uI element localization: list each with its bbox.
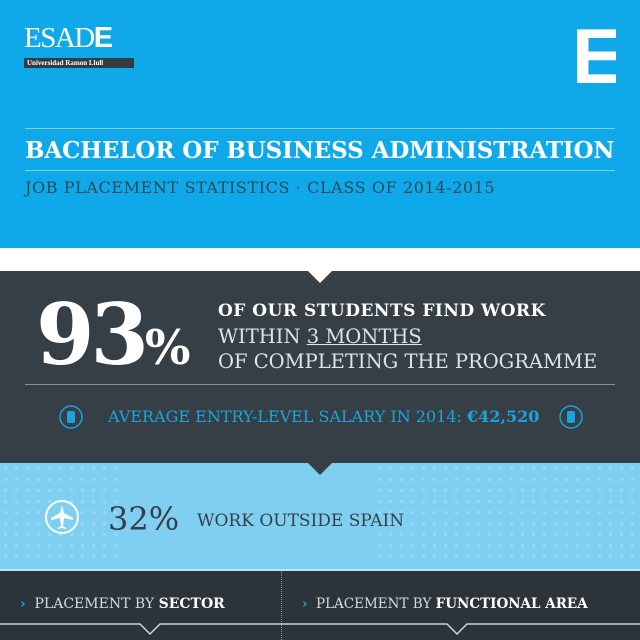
- panel: abroad: [0, 463, 640, 569]
- title: BACHELOR OF BUSINESS ADMINISTRATION: [25, 137, 614, 164]
- salary row: AVERAGE ENTRY-LEVEL SALARY IN 2014: €42,520: [108, 407, 539, 426]
- panel: employment stats: [0, 271, 640, 463]
- stat: 32%: 32%: [108, 500, 179, 538]
- icon: coins right: [559, 405, 583, 429]
- salary row: [59, 405, 583, 429]
- heading: sector: › PLACEMENT BY SECTOR: [20, 596, 225, 612]
- panel: placement headers: [0, 571, 640, 640]
- logo: ESADE: ESADE: [24, 22, 112, 54]
- subtitle: JOB PLACEMENT STATISTICS · CLASS OF 2014-2015: [25, 178, 495, 197]
- heading: functional area: › PLACEMENT BY FUNCTIONAL AREA: [302, 596, 588, 612]
- icon: plane: [45, 500, 79, 534]
- icon: coins left: [59, 405, 83, 429]
- panel: abroad: WORK OUTSIDE SPAIN: [197, 511, 404, 531]
- text block: statement: [218, 301, 597, 373]
- logo: ESADE: Universidad Ramon Llull: [27, 59, 103, 67]
- logo: ESADE: [24, 22, 134, 68]
- panel: header: [0, 0, 640, 248]
- text block: statement: OF COMPLETING THE PROGRAMME: [218, 350, 597, 373]
- text block: statement: WITHIN 3 MONTHS: [218, 325, 422, 348]
- big number 93%: 93%: [36, 285, 191, 384]
- text block: statement: OF OUR STUDENTS FIND WORK: [218, 301, 546, 321]
